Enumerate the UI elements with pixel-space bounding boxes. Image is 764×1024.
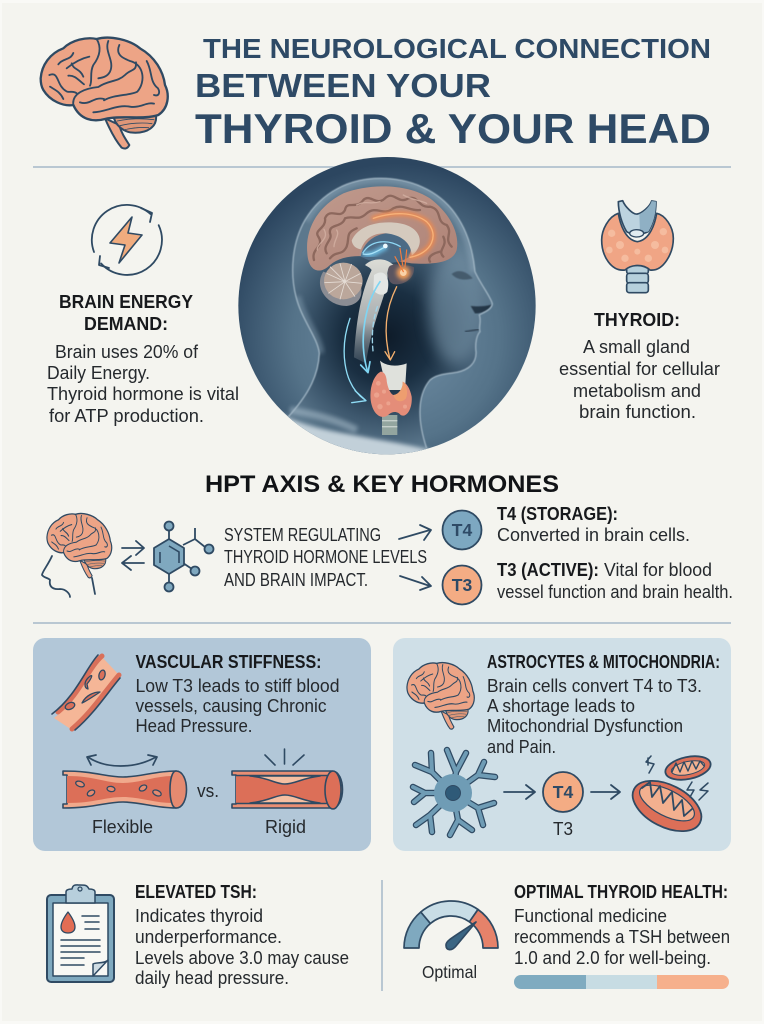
text: T3 active [497, 559, 733, 602]
icon: thyroid gland [602, 201, 673, 293]
title [195, 33, 711, 152]
illustration: rigid vessel [232, 771, 342, 809]
text block: Brain cells convert T4 to T3. [487, 675, 702, 696]
text block: SYSTEM REGULATING [224, 524, 381, 545]
badge: T4: T4 [553, 782, 573, 802]
brainstem [354, 242, 410, 363]
cerebellum [320, 263, 363, 306]
text: T4 storage: T4 (STORAGE): [497, 504, 618, 524]
text block: Functional medicine [514, 905, 667, 926]
label: optimal: Optimal [422, 962, 477, 982]
text block: metabolism and [573, 380, 701, 401]
heading: THYROID: [594, 310, 680, 330]
text block: Mitochondrial Dysfunction [487, 715, 683, 736]
text block: recommends a TSH between [514, 926, 730, 947]
text block: OPTIMAL THYROID HEALTH: [514, 882, 728, 902]
title: THE NEUROLOGICAL CONNECTION [203, 33, 711, 64]
icon: header brain [41, 38, 168, 149]
panel: vascular stiffness [33, 638, 371, 851]
thyroid in illustration [370, 361, 412, 435]
text: T3 active: vessel function and brain health. [497, 581, 733, 602]
badge: T4 [442, 510, 482, 550]
text block: and Pain. [487, 736, 556, 757]
text block: Levels above 3.0 may cause [135, 947, 349, 968]
panel: thyroid [559, 201, 720, 422]
panel: astrocytes and mitochondria [393, 638, 731, 851]
text block [135, 882, 349, 988]
icon: clipboard report [47, 885, 114, 982]
text block: THYROID HORMONE LEVELS [224, 546, 427, 567]
text block [136, 652, 340, 736]
text block: A shortage leads to [487, 695, 635, 716]
icon: blood vessel [52, 655, 120, 730]
text block: underperformance. [135, 926, 282, 947]
label: flexible: Flexible [92, 816, 153, 837]
brain [307, 186, 457, 284]
heading: BRAIN ENERGY [59, 292, 193, 312]
badge: T4: T4 [452, 520, 472, 540]
text block: for ATP production. [49, 405, 204, 426]
heading: DEMAND: [84, 314, 168, 334]
text block: ELEVATED TSH: [135, 882, 257, 902]
text block: AND BRAIN IMPACT. [224, 569, 368, 590]
orange nerve glow [373, 214, 433, 272]
icon: gauge [404, 901, 498, 950]
text: T4 storage [497, 504, 690, 545]
arrows to hormones [399, 525, 431, 590]
text block: vessels, causing Chronic [136, 695, 326, 716]
text block [514, 882, 730, 968]
heading [59, 292, 193, 334]
text block: brain function. [579, 401, 696, 422]
illustration: head with brain and thyroid [238, 157, 536, 470]
text block: Brain uses 20% of [55, 341, 199, 362]
arrow [504, 785, 535, 799]
label: vs: vs. [197, 780, 219, 801]
label: rigid: Rigid [265, 816, 306, 837]
title: BETWEEN YOUR [195, 67, 491, 104]
icon: head and brain [42, 514, 112, 597]
icon: molecule [154, 522, 214, 592]
arrow [591, 785, 620, 799]
text: T4 storage: Converted in brain cells. [497, 524, 690, 545]
text block [559, 336, 720, 422]
text block: essential for cellular [559, 358, 720, 379]
badge: T3 [442, 566, 482, 604]
text block: daily head pressure. [135, 967, 289, 988]
text block: Head Pressure. [136, 715, 252, 736]
text block [47, 341, 239, 426]
panel: optimal thyroid health [404, 882, 730, 989]
icon: rigid alert marks [265, 749, 304, 765]
panel: elevated TSH [47, 882, 349, 988]
badge: T3: T3 [452, 575, 472, 595]
arrows: feedback [122, 541, 144, 570]
arrow: flex [87, 755, 157, 766]
title: THYROID & YOUR HEAD [195, 105, 711, 152]
text block: VASCULAR STIFFNESS: [136, 652, 322, 672]
illustration: flexible vessel [63, 771, 186, 808]
text block: 1.0 and 2.0 for well-being. [514, 947, 711, 968]
progress bar [514, 975, 729, 989]
text: T3 active: Vital for blood [604, 559, 712, 580]
panel: brain energy demand [47, 205, 239, 426]
text block: Low T3 leads to stiff blood [136, 675, 340, 696]
icon: brain [407, 663, 474, 729]
heading: HPT axis: HPT AXIS & KEY HORMONES [205, 471, 559, 498]
text block: Daily Energy. [47, 362, 150, 383]
panel: HPT axis diagram [42, 504, 733, 604]
text block: A small gland [583, 336, 690, 357]
text block [487, 652, 720, 757]
label: T3: T3 [553, 818, 573, 839]
icon: mitochondria [624, 752, 713, 842]
icon: energy cycle [92, 205, 162, 275]
text block: Indicates thyroid [135, 905, 263, 926]
text: T3 active: T3 (ACTIVE): [497, 560, 599, 580]
text block [224, 524, 427, 590]
icon: astrocyte [413, 750, 495, 835]
badge: T4 [543, 772, 583, 812]
text block: Thyroid hormone is vital [47, 383, 239, 404]
arrows [344, 282, 397, 403]
